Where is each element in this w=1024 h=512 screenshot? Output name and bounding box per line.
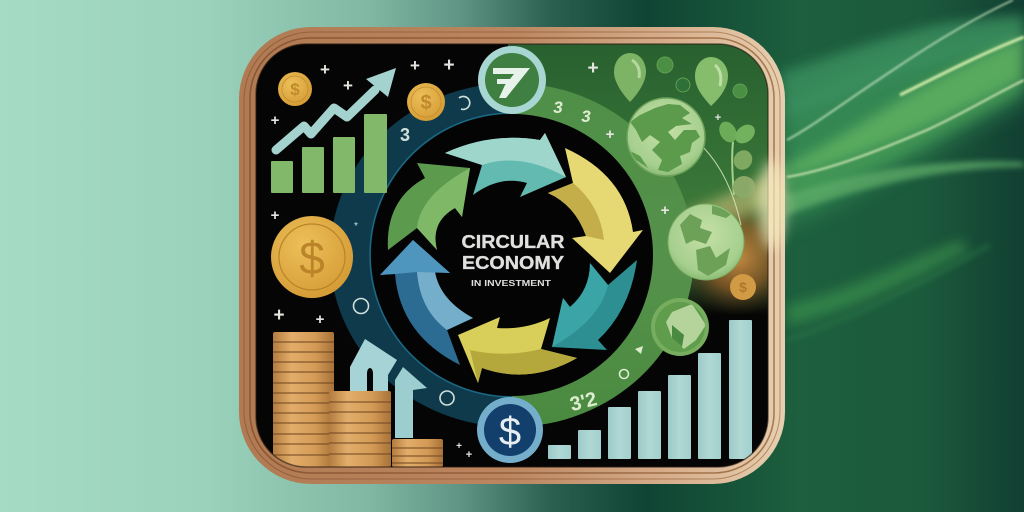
plus marks: + (456, 441, 462, 452)
top badge (478, 46, 546, 114)
plus marks: + (271, 112, 280, 129)
ring inner edge (370, 113, 512, 397)
arrow: left blue (380, 240, 473, 365)
coin: small right: $ (739, 279, 747, 295)
coin: top left: $ (290, 80, 300, 99)
plus marks: + (343, 76, 353, 95)
centre title: CIRCULAR (462, 231, 564, 252)
centre title: IN INVESTMENT (471, 278, 552, 288)
globe: top (627, 98, 705, 176)
plus marks: + (715, 112, 721, 124)
ring numerals: 3 (581, 107, 591, 126)
balloon left (614, 53, 646, 102)
coin: upper centre: $ (420, 92, 432, 114)
green light streaks (780, 0, 1024, 340)
coin stack: short (392, 439, 443, 467)
sprout (719, 122, 755, 198)
dark panel (256, 44, 768, 467)
bottom dollar badge: $ (499, 410, 521, 454)
plus marks: + (661, 202, 670, 219)
warm light bands (686, 172, 768, 224)
plus marks: + (316, 311, 325, 328)
panel contents (271, 44, 796, 467)
balloon right (695, 57, 728, 106)
green upper-right background (508, 44, 768, 315)
plus marks: + (587, 58, 599, 79)
glow across right frame edge (758, 160, 786, 250)
plus marks: + (443, 55, 455, 76)
small ring glyphs: * (354, 221, 358, 232)
rising trend arrow (276, 68, 396, 150)
orange glow (692, 208, 768, 312)
arrow: lower-right teal (552, 260, 637, 350)
ring numerals (400, 98, 599, 416)
arrow: right yellow (548, 148, 643, 273)
circular ring: green half (512, 83, 694, 427)
plus marks: + (410, 56, 420, 75)
arrow: top teal (445, 133, 566, 197)
centre title: ECONOMY (462, 252, 565, 273)
coin: top left (278, 72, 312, 106)
plus marks: + (271, 207, 280, 224)
light-blue bar chart (548, 320, 752, 459)
coin: small right (730, 274, 756, 300)
coin stack: medium (329, 391, 391, 467)
arrow: bottom yellow (458, 317, 577, 383)
circular ring: navy half (330, 83, 512, 427)
small ring glyphs (354, 96, 643, 405)
plus marks: + (606, 126, 615, 143)
outer thin arc (703, 147, 741, 225)
ring numerals: 3 (553, 98, 563, 117)
bottom dollar badge (477, 397, 543, 463)
copper frame (239, 27, 785, 484)
coin: upper centre (407, 83, 445, 121)
ring numerals: 3ʹ2 (568, 388, 599, 416)
arrow: upper-left green (388, 163, 470, 250)
coin stack: tall (273, 332, 334, 467)
panel edge shading (256, 44, 768, 467)
central black disc (371, 114, 653, 396)
globe: lower (651, 298, 709, 356)
plus marks: + (273, 305, 285, 326)
plus marks: + (466, 449, 472, 461)
coin: large left: $ (299, 232, 325, 284)
ring numerals: 3 (400, 125, 410, 145)
green bar chart (271, 114, 387, 193)
plus marks (271, 55, 721, 461)
house arrows (350, 339, 427, 438)
centre title (462, 234, 564, 286)
plus marks: + (320, 60, 330, 79)
coin: large left (271, 216, 353, 298)
globe: middle (668, 204, 744, 280)
small green spheres (657, 57, 747, 98)
